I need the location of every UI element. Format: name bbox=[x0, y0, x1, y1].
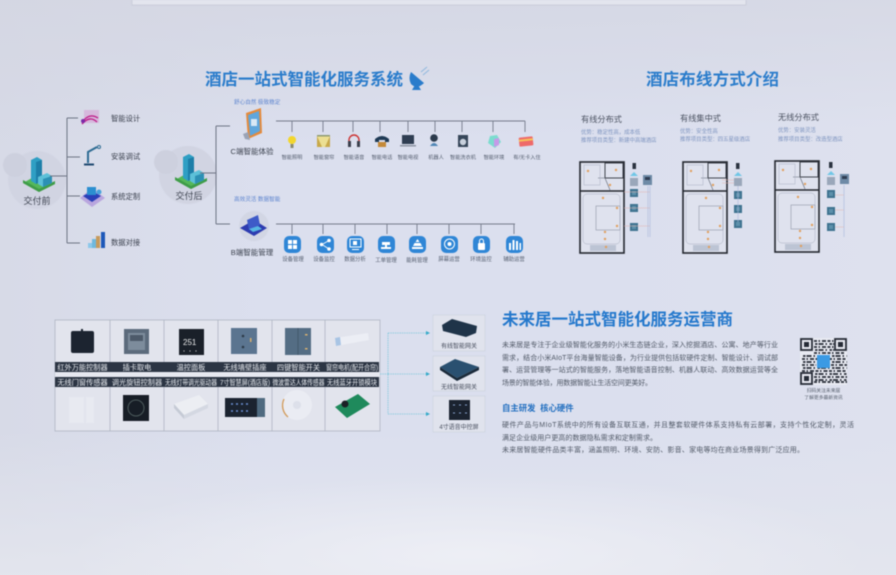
item: device monitoring: 设备监控 bbox=[313, 255, 335, 263]
text block: company intro: 需求，结合小米AIoT平台海量智能设备，为行业提供包括软硬件定制、智能设计、调试部 bbox=[502, 353, 778, 362]
panel: wireless gateway bbox=[433, 356, 485, 391]
item: energy management bbox=[406, 236, 428, 264]
item: environment: 智能环境 bbox=[484, 153, 504, 161]
item: auxiliary operation bbox=[503, 236, 525, 263]
panel: wired distributed: 有线分布式 bbox=[581, 114, 622, 124]
product: door sensor bbox=[69, 397, 94, 423]
tree: before delivery: 交付前 bbox=[23, 195, 51, 206]
panel: wired centralized bbox=[680, 113, 751, 253]
arrows: connectors to gateways bbox=[380, 331, 430, 416]
panel: wired distributed bbox=[580, 114, 657, 253]
item: lighting: 智能照明 bbox=[282, 153, 302, 161]
tree: before delivery bbox=[3, 110, 141, 248]
label strip: row 2: 调光旋钮控制器 bbox=[112, 378, 162, 387]
panel: wired centralized: 推荐项目类型：四五星级酒店 bbox=[680, 135, 751, 143]
product: LED driver bbox=[174, 395, 208, 419]
tree: after delivery: 交付后 bbox=[175, 190, 203, 201]
panel: C-end smart experience bbox=[231, 98, 541, 161]
product: IR controller bbox=[71, 329, 94, 353]
label strip: row 2: 无线门窗传感器 bbox=[57, 378, 108, 387]
item: washer: 智能洗衣机 bbox=[450, 153, 477, 161]
item: data analysis bbox=[344, 236, 366, 263]
item: robot: 机器人 bbox=[428, 153, 444, 161]
label strip: row 2: 7寸智慧屏(酒店版) bbox=[220, 378, 270, 387]
panel: wired gateway: 有线智能网关 bbox=[441, 342, 477, 350]
item: ticket management bbox=[375, 236, 397, 264]
item: curtain: 智能窗帘 bbox=[314, 153, 334, 161]
top frame edge bbox=[132, 0, 746, 5]
item: device monitoring bbox=[313, 236, 335, 263]
text block: hardware description bbox=[502, 420, 854, 454]
caption: C-end: 舒心自然 极致稳定 bbox=[234, 98, 281, 106]
icon: phone bbox=[243, 108, 262, 140]
panel: wireless gateway: 无线智能网关 bbox=[441, 383, 477, 391]
label strip: row 1: 红外万能控制器 bbox=[57, 363, 108, 372]
label: B-end: B端智能管理 bbox=[231, 247, 274, 257]
item: environment bbox=[484, 135, 504, 161]
product: bluetooth module bbox=[335, 394, 370, 418]
icon: satellite dish bbox=[410, 67, 429, 90]
item: energy management: 能耗管理 bbox=[406, 256, 428, 264]
text block: company intro: 署、运营管理等一站式的智能服务，落地智能语音控制、机器人联动、高效数据运营等全 bbox=[502, 365, 778, 374]
text block: hardware description: 未来居智能硬件品类丰富，涵盖照明、环境、安防、影音、家电等均在商业场景得到广泛应用。 bbox=[502, 445, 804, 454]
title: hotel service system: 酒店一站式智能化服务系统 bbox=[205, 69, 404, 89]
title: wiring methods: 酒店布线方式介绍 bbox=[646, 69, 779, 89]
label strip: row 2: 无线蓝牙开锁模块 bbox=[327, 378, 377, 387]
caption: B-end: 高效灵活 数据智能 bbox=[234, 195, 281, 203]
label: install: 安装调试 bbox=[111, 152, 141, 161]
icon: robot arm bbox=[84, 146, 100, 164]
icon: B-end platform bbox=[239, 211, 269, 241]
text block: company intro: 未来居是专注于企业级智能化服务的小米生态链企业，深入挖掘酒店、公寓、地产等行业 bbox=[502, 340, 778, 349]
label strip: row 1: 温控面板 bbox=[177, 363, 205, 372]
item: voice headset: 智能语音 bbox=[344, 153, 364, 161]
product: smart screen bbox=[225, 398, 265, 417]
label strip: row 2: 无线灯带调光驱动器 bbox=[165, 378, 217, 387]
item: card entry: 有/无卡入住 bbox=[513, 153, 541, 161]
item: TV: 智能电视 bbox=[398, 153, 418, 161]
product: radar sensor bbox=[282, 390, 312, 420]
product: curtain motor bbox=[335, 333, 369, 346]
QR code bbox=[800, 338, 847, 401]
label: C-end: C端智能体验 bbox=[231, 146, 274, 156]
text block: company intro: 场景的智能体验，用数据智能让生活空间更美好。 bbox=[502, 378, 652, 387]
panel: wired distributed: 推荐项目类型：新建中高端酒店 bbox=[581, 136, 657, 144]
item: card entry bbox=[513, 136, 541, 161]
item: ticket management: 工单管理 bbox=[375, 256, 397, 264]
label strip: row 2: 微波雷达人体传感器 bbox=[272, 378, 324, 387]
label strip: row 1: 四键智能开关 bbox=[277, 363, 320, 372]
item: device management bbox=[282, 236, 304, 263]
item: telephone bbox=[372, 136, 392, 161]
label: smart design: 智能设计 bbox=[111, 114, 140, 123]
panel: 4-inch voice screen: 4寸语音中控屏 bbox=[439, 423, 479, 431]
item: washer bbox=[450, 135, 477, 161]
panel: wired centralized: 有线集中式 bbox=[680, 113, 721, 123]
label strip: row 1: 无线墙壁插座 bbox=[223, 363, 267, 372]
panel: wireless distributed: 优势：安装灵活 bbox=[778, 126, 816, 134]
panel: wireless distributed bbox=[775, 112, 849, 252]
icon: data bars bbox=[88, 232, 105, 248]
item: curtain bbox=[314, 135, 334, 161]
panel: wireless distributed: 无线分布式 bbox=[778, 112, 819, 122]
label strip: row 1 bbox=[55, 362, 379, 372]
text block: hardware description: 硬件产品与MIoT系统中的所有设备互联互通，并且整套软硬件体系支持私有云部署，支持个性化定制，灵活 bbox=[502, 420, 854, 429]
product: wireless socket bbox=[231, 328, 257, 354]
item: TV bbox=[398, 135, 418, 161]
product: thermostat panel bbox=[179, 329, 204, 355]
label strip: row 1: 插卡取电 bbox=[123, 363, 151, 372]
item: auxiliary operation: 辅助运营 bbox=[503, 255, 525, 263]
text block: hardware description: 满足企业级用户更高的数据隐私需求和定制需求。 bbox=[502, 433, 657, 442]
product: dimmer knob bbox=[123, 395, 149, 421]
label: system custom: 系统定制 bbox=[111, 192, 140, 201]
item: data analysis: 数据分析 bbox=[344, 255, 366, 263]
panel: B-end smart management bbox=[231, 195, 525, 264]
product: card power switch bbox=[124, 329, 149, 354]
icon: smart design bbox=[81, 110, 99, 124]
product: thermostat panel: 251 bbox=[183, 338, 197, 347]
panel: product grid bbox=[55, 320, 380, 431]
label: data link: 数据对接 bbox=[111, 238, 141, 247]
item: device management: 设备管理 bbox=[282, 255, 304, 263]
panel: 4-inch voice screen bbox=[433, 396, 485, 432]
item: lighting bbox=[282, 136, 302, 161]
panel: wired distributed: 优势：稳定性高，成本低 bbox=[581, 128, 641, 136]
heading: future home operator: 未来居一站式智能化服务运营商 bbox=[502, 309, 733, 329]
item: environment monitoring bbox=[470, 236, 492, 263]
text block: company intro bbox=[502, 340, 778, 387]
product: four-key switch bbox=[285, 328, 311, 355]
label strip: row 2 bbox=[55, 377, 379, 387]
QR code: 了解更多最新资讯 bbox=[804, 394, 843, 401]
item: screen operation bbox=[438, 236, 460, 263]
item: telephone: 智能电话 bbox=[372, 153, 392, 161]
item: environment monitoring: 环境监控 bbox=[470, 255, 492, 263]
label strip: row 1: 窗帘电机(配开合帘) bbox=[326, 363, 378, 372]
item: robot bbox=[428, 134, 444, 161]
tree: after delivery bbox=[154, 126, 230, 224]
panel: wireless distributed: 推荐项目类型：改造型酒店 bbox=[778, 135, 843, 143]
icon: system stack bbox=[80, 187, 105, 207]
QR code: 扫码关注未来居 bbox=[807, 387, 840, 394]
panel: wired gateway bbox=[433, 315, 485, 351]
item: screen operation: 屏幕运营 bbox=[438, 255, 460, 263]
panel: wired centralized: 优势：安全性高 bbox=[680, 127, 718, 135]
subheading: core hardware: 自主研发 核心硬件 bbox=[502, 403, 574, 413]
item: voice headset bbox=[344, 135, 364, 161]
